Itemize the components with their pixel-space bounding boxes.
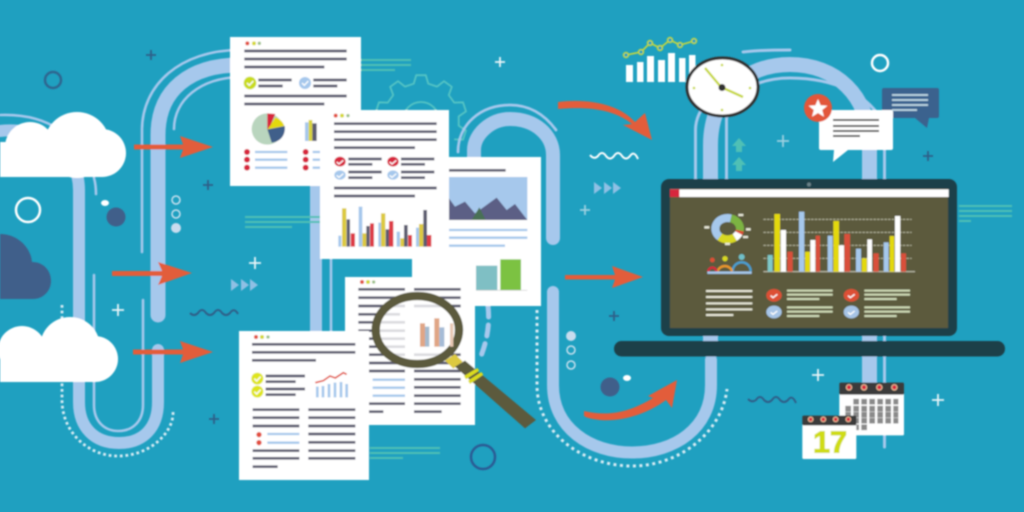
bar chart [763,212,915,272]
legend lines [373,380,405,396]
teal accent lines [245,60,1012,458]
icon: star badge [804,94,832,122]
speech bubble: white [819,110,893,162]
chart: top right bars and line [624,38,696,82]
arrow: curved bottom [584,380,677,420]
icon: magnifying glass [376,296,536,428]
flow pipes [0,50,884,466]
cloud: bottom [0,317,118,382]
small bars [305,120,317,141]
cloud: top [0,112,126,178]
arrow: top left [134,136,213,158]
icon: clock [687,58,758,116]
caption lines [449,230,527,246]
plus signs [112,50,944,424]
document: landscape [412,157,541,306]
check badges [244,77,311,89]
text lines [252,344,355,467]
legend lines [255,152,347,168]
legend dots [362,377,368,399]
text lines [334,124,437,196]
calendar: date 17: 17 [813,425,847,459]
grouped bar chart [338,207,431,247]
calendar: date 17 [802,416,856,459]
rings and dots [16,55,888,469]
laptop lid [661,179,957,336]
donut chart [704,215,751,244]
header line [449,166,506,174]
status dots [360,280,375,284]
laptop screen [670,189,948,328]
laptop [614,179,1005,356]
background gear outline [376,75,466,140]
pie chart [252,113,285,145]
text lines [244,51,347,104]
icon: up arrows [732,138,746,171]
trend chart [315,373,347,397]
arrow: centre [565,266,643,288]
legend lines [267,434,299,443]
small triangle markers [231,182,621,291]
arrow: curved top [558,101,652,140]
people icons [707,254,752,273]
calendar: month grid [839,383,904,435]
landscape picture [449,177,527,220]
screen text lines [706,291,752,315]
cloud: dark [0,234,51,299]
column chart [476,259,527,290]
browser bar [670,189,949,197]
status dots [334,114,350,118]
legend dots [256,432,262,445]
arrow: middle left [112,262,192,285]
wave squiggles [190,153,796,403]
document: magnified report [345,277,536,428]
document: bottom with trend [239,331,369,480]
speech bubble: dark [882,88,939,128]
text lines [358,289,461,412]
document: bar chart [320,110,449,259]
status dots [254,335,270,339]
document: top with pie [230,37,361,186]
laptop base [614,341,1005,356]
legend dots [244,149,309,171]
check badges [334,156,399,180]
screen check lists [766,289,910,318]
check badges [251,373,263,398]
status dots [245,41,261,45]
arrow: bottom left [133,341,213,363]
